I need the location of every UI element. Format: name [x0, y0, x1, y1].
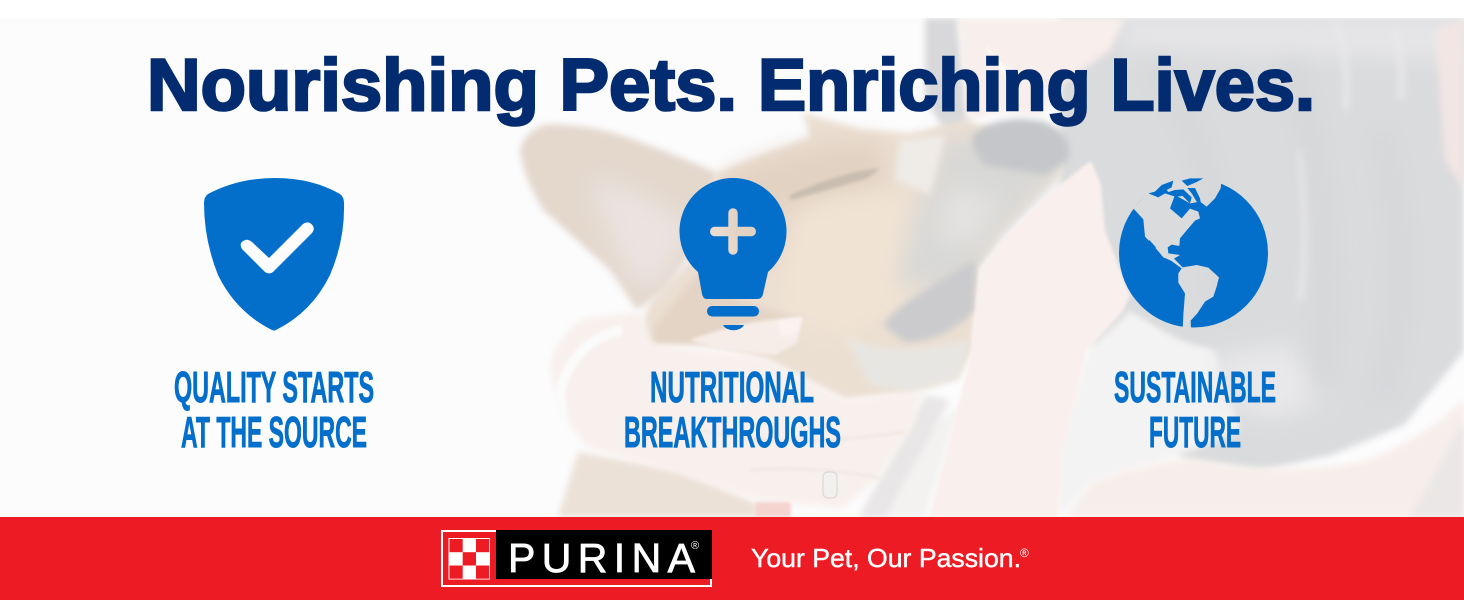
column: quality starts at the source [174, 178, 374, 457]
shirt edge [860, 395, 950, 517]
tagline: Your Pet, Our Passion. [751, 543, 1021, 573]
label: sustainable future: SUSTAINABLE [1114, 363, 1276, 412]
icon: globe [1119, 178, 1268, 328]
dog forehead brown [720, 140, 890, 260]
label: quality starts at the source: QUALITY STARTS [174, 363, 374, 412]
dog ear [520, 124, 717, 310]
dog cheek tan [792, 212, 810, 238]
tagline registered mark: ® [1020, 546, 1029, 560]
teeth [990, 52, 1011, 74]
finger creases [874, 476, 878, 478]
label: nutritional breakthroughs: BREAKTHROUGHS [624, 408, 841, 457]
dog body [558, 452, 760, 517]
right side skin streaks [1437, 22, 1462, 183]
wordmark: PURINA [508, 535, 696, 581]
column: nutritional breakthroughs [624, 178, 841, 457]
light hair tips [1226, 350, 1310, 414]
hair over shirt [1150, 321, 1200, 345]
hair near mouth [925, 18, 968, 130]
dog jaw under bulb [652, 276, 784, 348]
hair strands light [1301, 73, 1403, 294]
white shirt [1061, 311, 1240, 508]
clothing strip by hand [890, 414, 954, 516]
dog tongue [755, 502, 791, 517]
icon: shield with check mark [204, 178, 344, 330]
label: quality starts at the source: AT THE SOURCE [181, 408, 367, 457]
hair mass [1060, 18, 1464, 471]
bottom right straps [1416, 434, 1463, 516]
icon: light bulb with plus [679, 178, 787, 330]
label: nutritional breakthroughs: NUTRITIONAL [650, 363, 814, 412]
white chin fur [850, 340, 967, 389]
lower back skin [1066, 400, 1464, 517]
hair strands dark [1150, 60, 1400, 400]
dog head [634, 113, 1062, 400]
dog snout grey fur [895, 135, 1062, 290]
wrist band [560, 330, 622, 420]
upper hair highlight [1130, 24, 1436, 54]
label: sustainable future: FUTURE [1149, 408, 1241, 457]
forearm and hand [550, 312, 923, 508]
shoulder and arm [929, 161, 1130, 517]
title: Enriching Lives. [758, 45, 1315, 126]
title: Nourishing Pets. [147, 45, 737, 126]
inner ear [596, 184, 682, 284]
registered mark: ® [691, 540, 699, 552]
footer band [0, 517, 1464, 600]
Purina logo [442, 530, 712, 586]
checkerboard emblem [448, 538, 490, 580]
dog mouth [883, 260, 975, 342]
thumb over muzzle [690, 318, 802, 355]
snout light fur [895, 135, 945, 195]
faded photo of woman hugging dog [520, 18, 1464, 517]
dog nose [972, 119, 1069, 175]
dog eye [790, 168, 880, 200]
column: sustainable future [1114, 178, 1276, 448]
face [958, 18, 1125, 120]
ring [823, 472, 837, 498]
thumbnail [780, 316, 802, 324]
